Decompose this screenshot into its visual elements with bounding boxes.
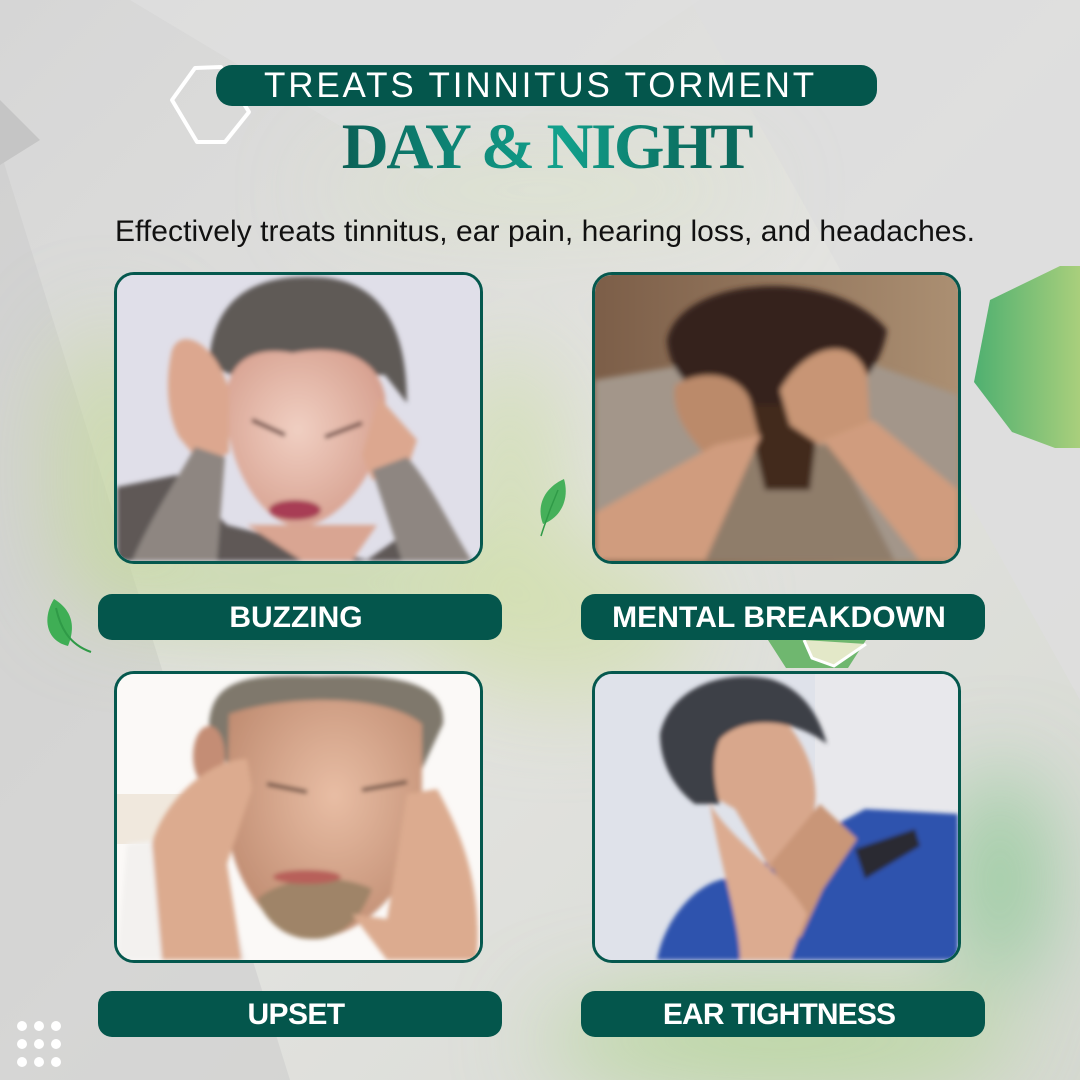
subtitle: Effectively treats tinnitus, ear pain, hearing loss, and headaches.	[115, 215, 975, 248]
label: buzzing	[98, 594, 502, 640]
decorative hexagon outline	[170, 65, 251, 144]
icon: leaf center	[540, 479, 566, 536]
decorative green hexagon middle	[768, 640, 867, 668]
icon: leaf left	[47, 599, 92, 653]
label: mental breakdown: MENTAL BREAKDOWN	[612, 601, 946, 634]
photo: man gripping hair	[592, 272, 961, 564]
title banner: TREATS TINNITUS TORMENT	[264, 66, 817, 105]
photo: woman covering ears	[114, 272, 483, 564]
label: buzzing: BUZZING	[229, 601, 363, 634]
photo: man holding ear	[592, 671, 961, 963]
label: ear tightness: EAR TIGHTNESS	[663, 998, 895, 1031]
label: upset	[98, 991, 502, 1037]
label: upset: UPSET	[247, 998, 345, 1031]
decorative green hexagon right	[974, 266, 1080, 448]
label: ear tightness	[581, 991, 985, 1037]
heading: DAY & NIGHT	[342, 111, 751, 183]
label: mental breakdown	[581, 594, 985, 640]
heading	[216, 112, 877, 182]
photo: man holding temples	[114, 671, 483, 963]
icon: dot grid	[17, 992, 590, 1067]
